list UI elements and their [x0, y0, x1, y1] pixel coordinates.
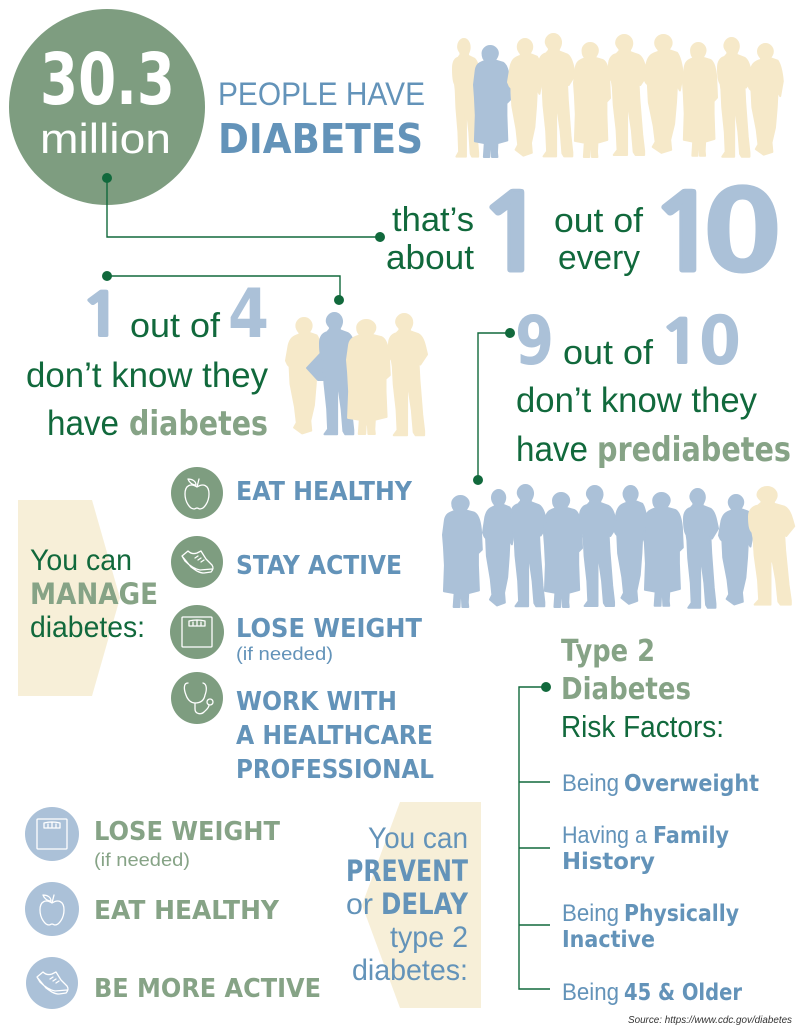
- risk factor: family history: Having a: [562, 822, 648, 849]
- risk factors heading: Diabetes: [561, 672, 691, 707]
- statistic: 1 out of 4 don't know they have diabetes: 1: [79, 286, 124, 345]
- silhouettes: top group of ten people, one in blue: [453, 34, 783, 157]
- risk factors heading: Type 2: [561, 634, 655, 669]
- risk factors bracket: [519, 682, 551, 989]
- panel: you can prevent or delay type 2 diabetes: [346, 802, 481, 1008]
- big circle: 30.3 million: [9, 9, 205, 205]
- risk factor: physically inactive: [562, 900, 739, 953]
- statistic: that's about 1 out of every 10: about: [386, 239, 475, 277]
- heading: people have diabetes: [218, 76, 425, 163]
- statistic: 9 out of 10 don't know they have prediabetes: out of: [563, 334, 654, 372]
- statistic: that's about 1 out of every 10: out of: [554, 202, 644, 240]
- risk factor: 45 and older: [562, 979, 743, 1006]
- manage list: work with a healthcare professional: [236, 687, 434, 785]
- risk factor: family history: History: [562, 849, 655, 875]
- icon: scale, blue: [25, 807, 79, 861]
- statistic: that's about 1 out of every 10: 0: [702, 162, 783, 300]
- risk factors heading: Risk Factors:: [561, 709, 724, 744]
- panel: you can manage diabetes: [18, 500, 158, 696]
- risk factor: physically inactive: Physically: [624, 901, 739, 927]
- heading: people have diabetes: PEOPLE HAVE: [218, 76, 425, 112]
- panel: you can manage diabetes: MANAGE: [30, 577, 158, 611]
- statistic: 9 out of 10 don't know they have prediabetes: 9: [515, 302, 554, 381]
- statistic: 9 out of 10 don't know they have prediabetes: have: [516, 430, 588, 469]
- panel: you can manage diabetes: You can: [30, 544, 132, 577]
- manage list: lose weight: LOSE WEIGHT: [236, 614, 422, 644]
- risk factor: family history: Family: [653, 823, 729, 849]
- statistic: 1 out of 4 don't know they have diabetes: 4: [228, 275, 269, 354]
- prevent list: be more active: BE MORE ACTIVE: [94, 974, 321, 1004]
- connector: 1 out of 4: [102, 271, 344, 305]
- heading: people have diabetes: DIABETES: [218, 115, 423, 163]
- manage list: stay active: STAY ACTIVE: [236, 551, 402, 581]
- prevent list: lose weight: LOSE WEIGHT: [94, 817, 280, 847]
- statistic: 9 out of 10 don't know they have prediabetes: don’t know they: [516, 381, 757, 420]
- icon: apple, blue: [25, 882, 79, 936]
- panel: you can prevent or delay type 2 diabetes: diabetes:: [352, 954, 468, 987]
- icon: scale: [170, 605, 224, 659]
- big circle: 30.3 million: million: [40, 115, 171, 162]
- panel: you can manage diabetes: diabetes:: [30, 611, 145, 644]
- risk factor: 45 and older: Being: [562, 979, 619, 1006]
- risk factor: overweight: Being: [562, 770, 619, 797]
- statistic: that's about 1 out of every 10: that’s: [392, 201, 474, 239]
- statistic: 1 out of 4 don't know they have diabetes: diabetes: [129, 404, 268, 444]
- icon: shoe: [171, 536, 223, 588]
- silhouettes: group of four people, one in blue: [286, 313, 427, 435]
- icon: apple: [171, 467, 223, 519]
- statistic: that's about 1 out of every 10: every: [558, 239, 640, 277]
- connector: 9 out of 10: [473, 328, 515, 485]
- statistic: that's about 1 out of every 10: 1: [647, 182, 723, 286]
- statistic: 9 out of 10 don't know they have prediabetes: 0: [699, 302, 741, 381]
- statistic: 1 out of 4 don't know they have diabetes: have: [47, 404, 119, 443]
- icon: shoe, blue: [26, 957, 78, 1009]
- risk factor: 45 and older: 45 & Older: [624, 980, 743, 1006]
- prevent list: lose weight: [94, 817, 280, 870]
- panel: you can prevent or delay type 2 diabetes: type 2: [390, 921, 468, 954]
- manage list: lose weight: (if needed): [236, 643, 333, 664]
- connector: 30.3 million to 1 out of 10: [102, 173, 385, 242]
- manage list: work with a healthcare professional: A HEALTHCARE: [236, 721, 433, 751]
- manage list: work with a healthcare professional: PROFESSIONAL: [236, 755, 434, 785]
- manage list: eat healthy: EAT HEALTHY: [236, 477, 413, 507]
- source note: Source: https://www.cdc.gov/diabetes: [628, 1014, 793, 1026]
- risk factor: overweight: Overweight: [624, 771, 759, 797]
- manage list: lose weight: [236, 614, 422, 664]
- manage list: work with a healthcare professional: WORK WITH: [236, 687, 397, 717]
- risk factors heading: [561, 634, 724, 744]
- risk factor: overweight: [562, 770, 759, 797]
- silhouettes: group of ten people, one in beige: [443, 485, 794, 608]
- statistic: that's about 1 out of every 10: 1: [475, 182, 551, 286]
- panel: you can prevent or delay type 2 diabetes: DELAY: [381, 887, 469, 921]
- risk factor: family history: [562, 822, 729, 875]
- statistic: 1 out of 4 don't know they have diabetes: [26, 275, 269, 444]
- panel: you can prevent or delay type 2 diabetes: or: [346, 888, 373, 921]
- statistic: 1 out of 4 don't know they have diabetes: don’t know they: [26, 356, 268, 395]
- statistic: 1 out of 4 don't know they have diabetes: out of: [130, 307, 221, 345]
- panel: you can prevent or delay type 2 diabetes: PREVENT: [346, 854, 468, 888]
- prevent list: eat healthy: EAT HEALTHY: [94, 896, 280, 926]
- icon: stethoscope: [171, 672, 223, 724]
- risk factor: physically inactive: Inactive: [562, 927, 655, 953]
- risk factor: physically inactive: Being: [562, 900, 619, 927]
- statistic: that's about 1 out of every 10: [386, 162, 783, 300]
- prevent list: lose weight: (if needed): [94, 849, 190, 870]
- statistic: 9 out of 10 don't know they have prediabetes: 1: [658, 313, 703, 372]
- big circle: 30.3 million: 30.3: [40, 38, 175, 121]
- statistic: 9 out of 10 don't know they have prediabetes: [515, 302, 791, 470]
- panel: you can prevent or delay type 2 diabetes: You can: [368, 822, 468, 855]
